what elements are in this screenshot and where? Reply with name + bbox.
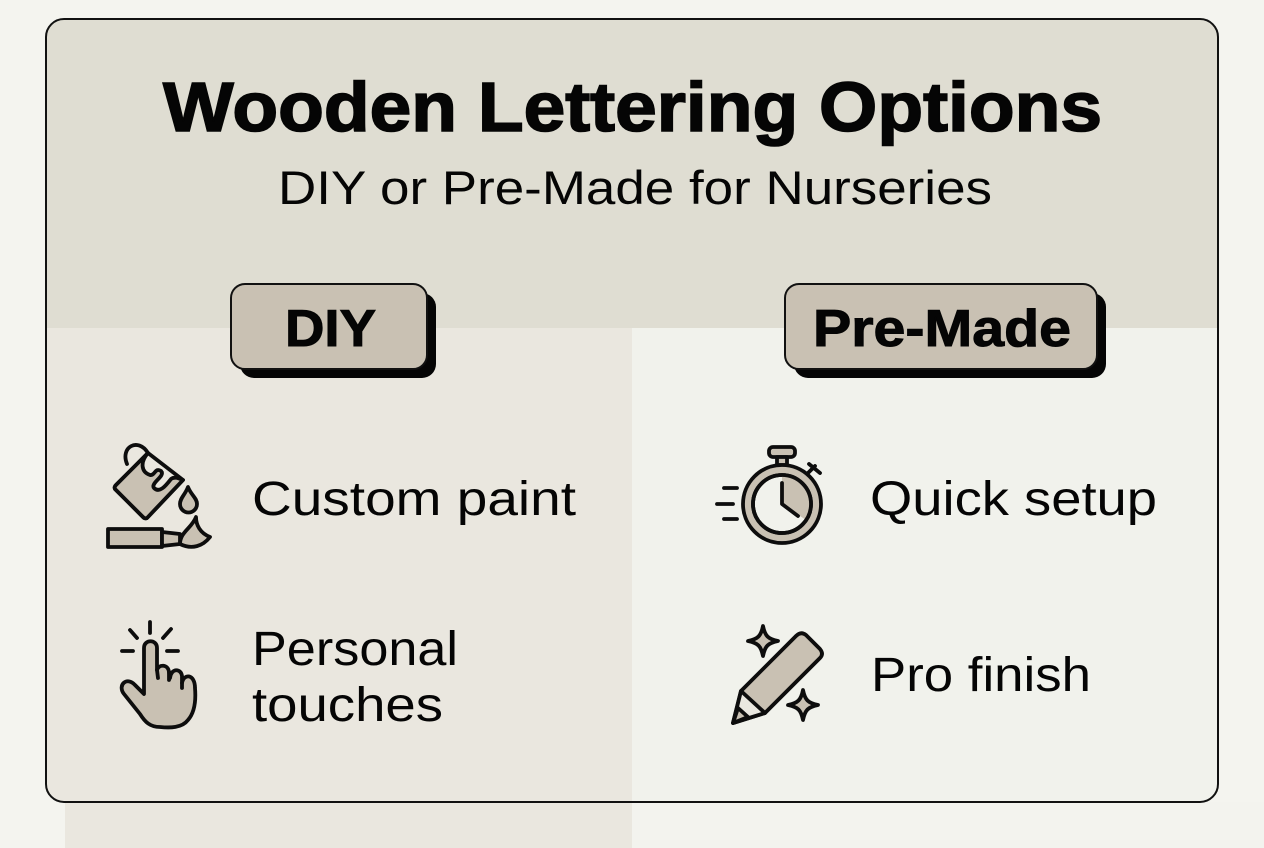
title: Wooden Lettering Options [163, 68, 1102, 146]
icon: stopwatch [717, 447, 821, 543]
panel: Pre-Made column [632, 328, 1218, 802]
badge: Pre-Made [785, 284, 1106, 378]
text: Quick setup: Quick setup [870, 473, 1157, 526]
panel: header band [46, 19, 1218, 328]
text: Personal touches: touches [252, 679, 443, 732]
icon: paint can and brush [108, 445, 210, 547]
text: Personal touches [252, 623, 458, 732]
panel: DIY column [46, 328, 632, 802]
icon: pointing hand [122, 622, 195, 727]
subtitle: DIY or Pre-Made for Nurseries [278, 161, 992, 214]
text: Personal touches: Personal [252, 623, 458, 676]
text: Pro finish: Pro finish [871, 649, 1091, 702]
icon: pencil with sparkles [733, 626, 822, 723]
badge: DIY: DIY [285, 300, 376, 358]
badge: Pre-Made: Pre-Made [813, 300, 1071, 358]
badge: DIY [231, 284, 436, 378]
text: Custom paint: Custom paint [252, 473, 576, 526]
